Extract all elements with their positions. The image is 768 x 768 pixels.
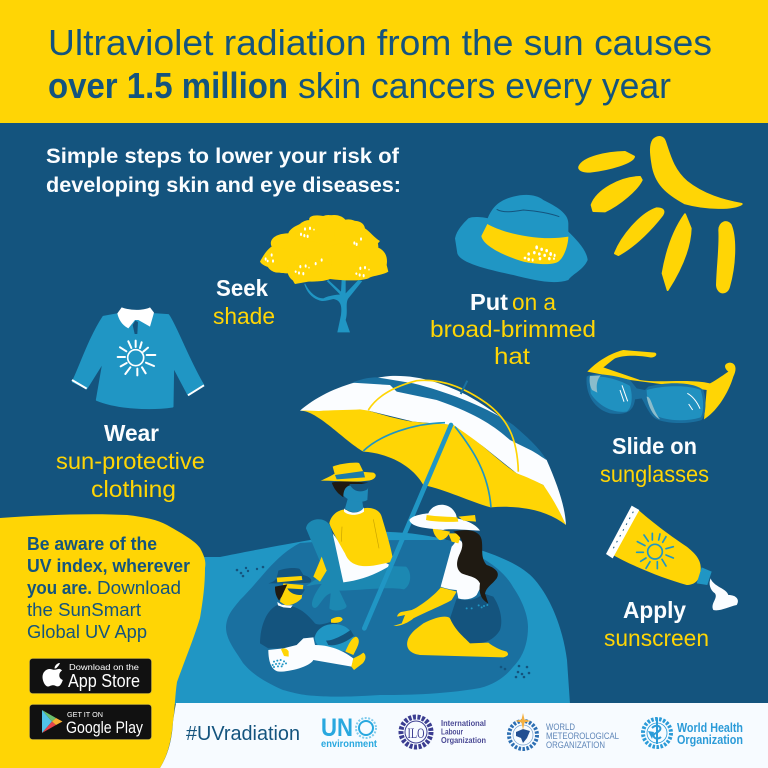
label: put on a broad-brimmed hat: Put bbox=[470, 289, 508, 315]
label: seek shade bbox=[213, 275, 275, 329]
label: wear sun-protective clothing: sun-protective bbox=[56, 448, 205, 474]
label: put on a broad-brimmed hat: hat bbox=[494, 343, 531, 369]
icon: long-sleeved shirt bbox=[72, 304, 204, 408]
logo: WMO: METEOROLOGICAL bbox=[546, 731, 619, 742]
panel text: you are. bbox=[27, 578, 92, 598]
label: put on a broad-brimmed hat bbox=[430, 289, 596, 369]
button: App Store bbox=[30, 658, 152, 694]
label: seek shade: shade bbox=[213, 303, 275, 329]
label: seek shade: Seek bbox=[216, 275, 268, 301]
logo: WHO: World Health bbox=[677, 720, 743, 735]
header banner: Ultraviolet radiation from the sun causes bbox=[48, 22, 712, 63]
label: slide on sunglasses: sunglasses bbox=[600, 461, 709, 487]
logo: WMO: WORLD bbox=[546, 722, 575, 733]
header banner bbox=[0, 0, 768, 123]
logo: UN environment: environment bbox=[321, 739, 378, 750]
panel text: Be aware of the bbox=[27, 534, 157, 554]
header banner: skin cancers every year bbox=[298, 65, 671, 106]
label: slide on sunglasses bbox=[600, 433, 709, 487]
label: wear sun-protective clothing: Wear bbox=[104, 420, 159, 446]
icon: sunscreen tube bbox=[606, 506, 738, 610]
label: slide on sunglasses: Slide on bbox=[612, 433, 697, 459]
logo: WMO bbox=[509, 713, 619, 751]
logo: WMO: ORGANIZATION bbox=[546, 740, 605, 751]
button: Google Play: Google Play bbox=[66, 718, 143, 737]
person: kneeling woman with white hat bbox=[393, 505, 508, 657]
person: child with ball bbox=[260, 568, 366, 672]
label: put on a broad-brimmed hat: on a bbox=[512, 289, 556, 315]
person: seated man with hat bbox=[306, 463, 410, 610]
umbrella bbox=[300, 376, 566, 628]
header banner: over 1.5 million bbox=[48, 65, 288, 106]
label: apply sunscreen: sunscreen bbox=[604, 625, 709, 651]
subheading: developing skin and eye diseases: bbox=[46, 174, 401, 197]
logo: WHO bbox=[643, 718, 743, 747]
hashtag: #UVradiation bbox=[186, 723, 300, 745]
panel text: Global UV App bbox=[27, 622, 147, 642]
footer bar bbox=[160, 703, 768, 768]
icon: hat bbox=[455, 195, 588, 282]
logo: UN environment bbox=[321, 714, 378, 750]
logo: ILO: ILO bbox=[408, 726, 425, 742]
label: wear sun-protective clothing: clothing bbox=[91, 476, 176, 502]
icon: sun rays bbox=[579, 137, 742, 292]
icon: sunglasses bbox=[587, 350, 736, 423]
ground blob bbox=[150, 532, 570, 704]
logo: ILO: Organization bbox=[441, 735, 486, 745]
button: App Store: Download on the bbox=[69, 662, 139, 672]
button: Google Play bbox=[30, 704, 152, 740]
label: wear sun-protective clothing bbox=[56, 420, 205, 502]
panel text bbox=[27, 534, 190, 642]
logo: UN environment: UN bbox=[321, 714, 353, 742]
label: apply sunscreen bbox=[604, 597, 709, 651]
subheading: Simple steps to lower your risk of bbox=[46, 145, 400, 168]
icon: tree bbox=[260, 215, 388, 332]
label: put on a broad-brimmed hat: broad-brimmed bbox=[430, 316, 596, 342]
logo: ILO bbox=[401, 717, 486, 747]
ground inner shadow bbox=[226, 540, 528, 697]
button: App Store: App Store bbox=[68, 671, 140, 691]
panel text: UV index, wherever bbox=[27, 556, 190, 576]
panel text: the SunSmart bbox=[27, 600, 141, 620]
logo: WHO: Organization bbox=[677, 732, 743, 747]
label: apply sunscreen: Apply bbox=[623, 597, 686, 623]
button: Google Play: GET IT ON bbox=[67, 710, 103, 719]
logo: ILO: International bbox=[441, 718, 486, 728]
logo: ILO: Labour bbox=[441, 726, 464, 736]
subheading bbox=[46, 145, 401, 197]
panel text: Download bbox=[97, 578, 181, 598]
ground specks bbox=[236, 566, 530, 678]
panel: app download bbox=[0, 514, 205, 768]
